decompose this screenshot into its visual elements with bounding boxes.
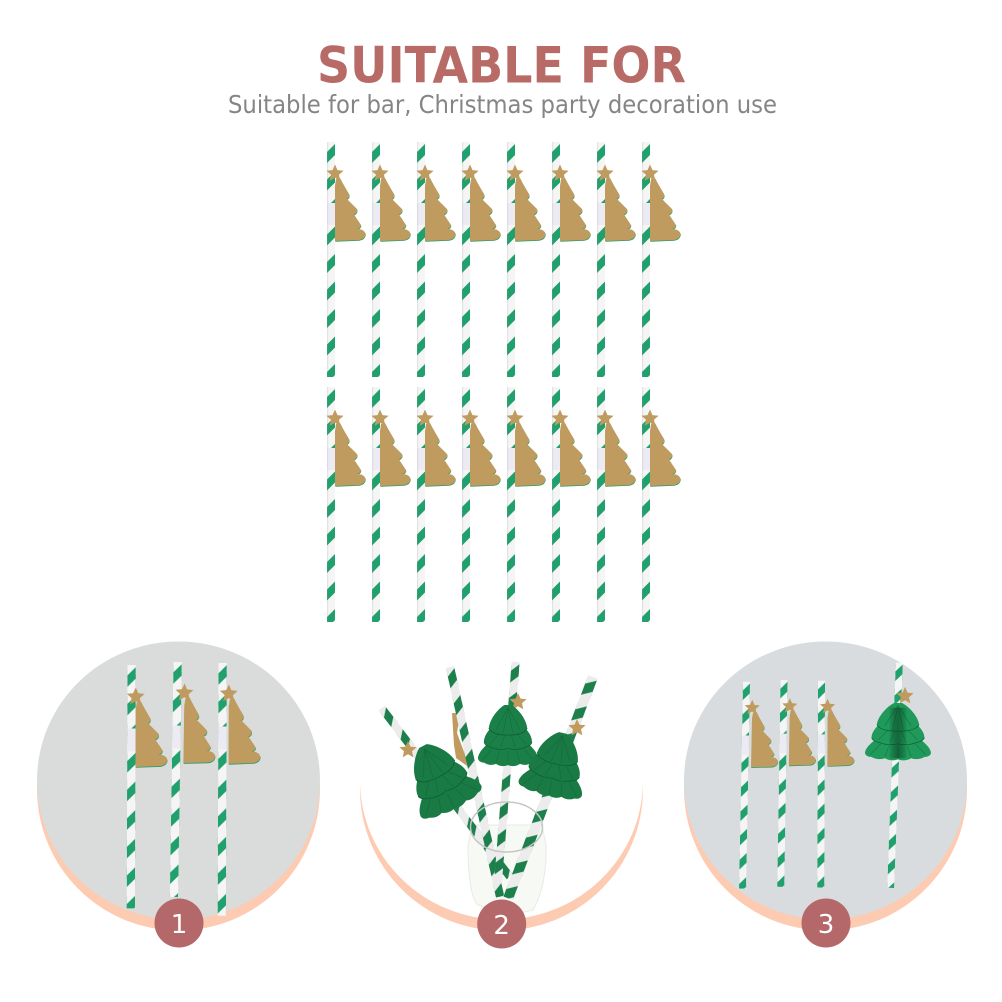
subtitle: Suitable for bar, Christmas party decoration use: [228, 90, 777, 119]
photo straw B: [170, 662, 217, 898]
grey photo circle: [37, 642, 320, 920]
badge 3: 3: [818, 910, 834, 940]
straw 15: [596, 387, 636, 622]
straw 6: [551, 142, 591, 377]
honeycomb tree centre: [478, 705, 538, 766]
badge 3: [802, 898, 850, 948]
photo straw A: [126, 665, 168, 908]
straw 14: [551, 387, 591, 622]
straw 7: [596, 142, 636, 377]
straw 13: [506, 387, 546, 622]
photo straw C: [817, 681, 855, 888]
panel: photo 3: [684, 642, 967, 948]
badge 1: [154, 898, 204, 948]
panel: photo 2: [360, 642, 643, 948]
straw 9: [326, 387, 366, 622]
top row of straws with kraft trees: [326, 142, 681, 377]
straw 16: [641, 387, 681, 622]
straw 5: [506, 142, 546, 377]
badge 2: 2: [493, 911, 510, 941]
peach backing circle: [37, 648, 320, 930]
title: SUITABLE FOR: [317, 36, 686, 94]
photo straw C: [218, 663, 261, 916]
badge 1: 1: [171, 910, 187, 940]
honeycomb tree left: [393, 731, 485, 824]
kraft tree on straw: [452, 713, 470, 768]
decorated straw 4: [503, 675, 598, 900]
straw 8: [641, 142, 681, 377]
badge 2: [477, 900, 526, 948]
panel: photo 1: [37, 642, 320, 948]
decorated straw 3: [494, 662, 520, 884]
straw 11: [416, 387, 456, 622]
decorated straw 1: [379, 706, 513, 879]
gold stars: [399, 693, 586, 757]
peach backing circle: [360, 648, 643, 930]
honeycomb tree: [865, 703, 931, 760]
straw 1: [326, 142, 366, 377]
glass rim: [470, 802, 542, 852]
gold star: [896, 687, 914, 703]
bottom row of straws with kraft trees: [326, 387, 681, 622]
straw 10: [371, 387, 411, 622]
straw 3: [416, 142, 456, 377]
glass body: [468, 825, 546, 913]
grey photo circle: [684, 642, 967, 920]
decorated straw 2: [446, 666, 504, 898]
honeycomb tree right: [517, 726, 595, 804]
photo straw A: [739, 682, 780, 889]
photo straw D: [887, 663, 903, 888]
white inner circle: [360, 642, 643, 920]
straw 12: [461, 387, 501, 622]
straw 4: [461, 142, 501, 377]
straw 2: [371, 142, 411, 377]
peach backing circle: [684, 648, 967, 930]
photo straw B: [777, 680, 817, 887]
